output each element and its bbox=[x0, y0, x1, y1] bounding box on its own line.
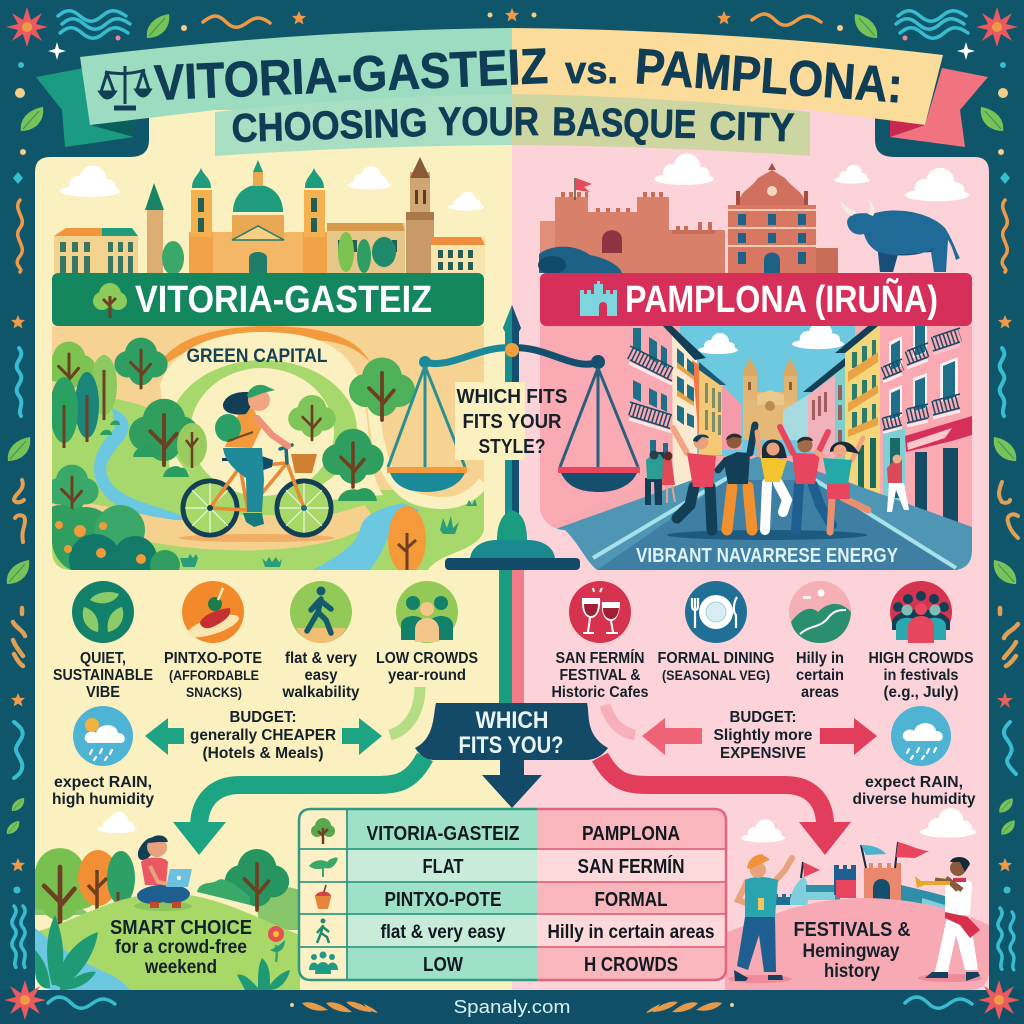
title line 2: CHOOSING bbox=[231, 101, 428, 151]
icon: rain and sun bbox=[73, 706, 133, 766]
centre strip bbox=[499, 570, 524, 705]
background people bbox=[645, 450, 909, 512]
title line 2: CITY bbox=[709, 104, 795, 150]
ribbon tails bbox=[36, 68, 988, 147]
river right bbox=[313, 503, 420, 570]
title line 1: PAMPLONA: bbox=[633, 38, 905, 114]
centre balance scale bbox=[387, 305, 640, 570]
weather label bbox=[852, 774, 976, 808]
flow arrow: to Pamplona bbox=[600, 757, 851, 855]
label: QUIET, bbox=[80, 650, 126, 667]
icon: walking person bbox=[290, 581, 352, 643]
ribbon band bbox=[80, 28, 943, 125]
title line 2: YOUR bbox=[438, 100, 539, 144]
arrow: left bbox=[145, 718, 184, 755]
column: Pamplona: FORMAL bbox=[594, 889, 668, 911]
shrub bbox=[237, 958, 290, 990]
label: certain bbox=[796, 667, 844, 684]
budget text: Slightly more bbox=[714, 727, 813, 744]
bush mounds bbox=[100, 420, 377, 501]
trees bbox=[42, 338, 426, 574]
icon: hills bbox=[789, 581, 851, 643]
buildings right bbox=[783, 326, 972, 530]
icon: big crowd bbox=[890, 581, 952, 643]
table cells bbox=[299, 809, 726, 980]
label: LOW CROWDS bbox=[376, 650, 478, 667]
label: VIBE bbox=[86, 684, 120, 701]
label: SUSTAINABLE bbox=[53, 667, 153, 684]
column: Vitoria-Gasteiz: LOW bbox=[423, 954, 463, 976]
hill bbox=[725, 898, 989, 990]
column: Pamplona: H CROWDS bbox=[584, 954, 678, 976]
flower bbox=[268, 926, 285, 962]
icon: balance scale bbox=[100, 66, 150, 108]
dancers bbox=[673, 425, 868, 532]
title line 1: vs. bbox=[565, 50, 618, 92]
icon: rain cloud bbox=[891, 706, 951, 766]
column: Vitoria-Gasteiz: VITORIA-GASTEIZ bbox=[366, 823, 520, 845]
skyline: Vitoria-Gasteiz bbox=[54, 157, 485, 275]
bushes and berries bbox=[52, 499, 477, 570]
man with hat bbox=[728, 854, 792, 983]
text: smart choice: SMART CHOICE bbox=[110, 917, 252, 939]
label: SNACKS) bbox=[186, 684, 242, 700]
budget text: generally CHEAPER bbox=[190, 727, 336, 744]
budget text bbox=[714, 709, 813, 762]
title line 2: BASQUE bbox=[552, 100, 697, 147]
weather label: expect RAIN, bbox=[54, 774, 152, 791]
title line 1: VITORIA-GASTEIZ bbox=[153, 38, 549, 111]
illustration: Pamplona street bbox=[540, 322, 972, 570]
label bbox=[53, 650, 153, 701]
label bbox=[658, 650, 774, 683]
castle skyline bbox=[776, 842, 945, 909]
text: festivals: history bbox=[824, 961, 880, 982]
budget text: EXPENSIVE bbox=[720, 745, 806, 762]
title line 1 bbox=[153, 38, 905, 114]
column: Vitoria-Gasteiz: PINTXO-POTE bbox=[384, 889, 502, 911]
flourish: left bbox=[290, 1002, 378, 1013]
weather label: high humidity bbox=[52, 791, 154, 808]
label bbox=[552, 648, 649, 701]
feature row: Vitoria-Gasteiz bbox=[53, 581, 478, 701]
river bbox=[35, 928, 130, 990]
header: Vitoria-Gasteiz bbox=[52, 273, 484, 326]
label: easy bbox=[304, 667, 338, 684]
title line 2 bbox=[231, 100, 795, 151]
column: Pamplona: Hilly in certain areas bbox=[548, 922, 714, 943]
arrow: right bbox=[342, 718, 382, 755]
subtitle band bbox=[215, 94, 810, 156]
city name: VITORIA-GASTEIZ bbox=[135, 279, 432, 321]
which fits you banner: WHICH bbox=[476, 707, 548, 734]
icon: wine glasses bbox=[569, 581, 631, 643]
question text: FITS YOUR bbox=[462, 411, 562, 433]
connector: low crowds bbox=[390, 687, 420, 735]
column: Vitoria-Gasteiz bbox=[366, 823, 520, 976]
icon: pintxo bbox=[182, 581, 244, 643]
weather label: expect RAIN, bbox=[865, 774, 963, 791]
footer band bbox=[0, 980, 1024, 1024]
church bbox=[742, 357, 798, 440]
trumpeter bbox=[915, 857, 982, 982]
icon: small group bbox=[396, 581, 458, 643]
header: Pamplona bbox=[540, 273, 972, 326]
question backing bbox=[455, 382, 525, 460]
label: Historic Cafes bbox=[552, 684, 649, 701]
scene: smart choice bbox=[19, 812, 300, 990]
label bbox=[868, 650, 974, 701]
text: smart choice: for a crowd-free bbox=[115, 937, 247, 958]
label: (SEASONAL VEG) bbox=[662, 667, 770, 683]
column: Pamplona bbox=[548, 823, 714, 976]
title ribbon bbox=[36, 28, 988, 156]
left pan bbox=[387, 366, 467, 492]
label: SAN FERMÍN bbox=[556, 648, 644, 667]
label: in festivals bbox=[884, 667, 959, 684]
leafy plant bbox=[35, 915, 98, 990]
label: PINTXO-POTE bbox=[164, 650, 262, 667]
column: Vitoria-Gasteiz: FLAT bbox=[422, 856, 464, 878]
cyclist bbox=[179, 385, 335, 542]
icon: bull bbox=[840, 199, 960, 272]
buildings left bbox=[627, 326, 742, 487]
label bbox=[376, 650, 478, 684]
question text: STYLE? bbox=[478, 436, 546, 458]
windows with white frames bbox=[889, 326, 958, 421]
right pan bbox=[558, 368, 640, 492]
label: green capital: GREEN CAPITAL bbox=[186, 346, 328, 367]
label: FESTIVAL & bbox=[560, 667, 641, 684]
label: Hilly in bbox=[796, 650, 844, 667]
budget row: Pamplona bbox=[605, 705, 976, 808]
caption: vibrant navarrese energy: VIBRANT NAVARRESE ENERGY bbox=[636, 545, 899, 567]
shop awning bbox=[905, 416, 972, 452]
label: HIGH CROWDS bbox=[868, 650, 974, 667]
scene: festivals bbox=[725, 808, 989, 990]
illustration: green capital cyclist bbox=[40, 326, 484, 586]
icon: sustainable leaves bbox=[72, 581, 134, 643]
website: Spanaly.com bbox=[454, 997, 570, 1017]
pale halo around centre scale bbox=[525, 326, 597, 570]
icon: castle bbox=[580, 281, 617, 316]
text: smart choice: weekend bbox=[144, 957, 217, 978]
road bbox=[52, 502, 372, 550]
column: Pamplona: PAMPLONA bbox=[582, 823, 680, 845]
text: festivals: FESTIVALS & bbox=[794, 919, 910, 941]
base bbox=[445, 510, 580, 570]
icon: tree bbox=[93, 283, 127, 318]
budget text: (Hotels & Meals) bbox=[202, 745, 324, 762]
arm bbox=[419, 343, 605, 369]
city name: PAMPLONA (IRUÑA) bbox=[625, 277, 938, 321]
label: flat & very bbox=[285, 650, 357, 667]
budget text bbox=[190, 709, 336, 762]
budget row: Vitoria-Gasteiz bbox=[52, 687, 420, 808]
label: walkability bbox=[282, 684, 360, 701]
label bbox=[282, 650, 360, 701]
icon: plate and cutlery bbox=[685, 581, 747, 643]
connector: festivals bbox=[605, 705, 635, 735]
weather label: diverse humidity bbox=[852, 791, 976, 808]
budget text: BUDGET: bbox=[730, 709, 796, 726]
post bbox=[503, 305, 521, 570]
hill bbox=[35, 893, 300, 990]
column: Vitoria-Gasteiz: flat & very easy bbox=[380, 922, 506, 943]
label: (e.g., July) bbox=[884, 684, 958, 701]
question text bbox=[456, 386, 568, 458]
budget text: BUDGET: bbox=[230, 709, 296, 726]
label: year-round bbox=[388, 667, 466, 684]
text: smart choice bbox=[110, 920, 252, 973]
weather label bbox=[52, 774, 154, 808]
sky bbox=[680, 322, 855, 456]
text: festivals bbox=[794, 919, 910, 982]
street bbox=[553, 453, 972, 570]
question text: WHICH FITS bbox=[456, 386, 568, 408]
comparison table bbox=[299, 809, 726, 980]
which fits you banner bbox=[415, 703, 608, 808]
label: areas bbox=[801, 684, 839, 701]
feature row: Pamplona bbox=[552, 581, 974, 701]
column: Pamplona: SAN FERMÍN bbox=[578, 855, 684, 878]
flow arrow: to Vitoria-Gasteiz bbox=[173, 757, 425, 855]
label bbox=[796, 650, 844, 701]
arrow: left bbox=[642, 718, 702, 755]
river left bbox=[94, 408, 183, 520]
girl with laptop bbox=[134, 835, 192, 911]
arrow: right bbox=[820, 718, 877, 755]
label bbox=[164, 650, 262, 700]
label: (AFFORDABLE bbox=[169, 667, 259, 683]
label: FORMAL DINING bbox=[658, 650, 774, 667]
text: festivals: Hemingway bbox=[802, 941, 900, 962]
skyline: Pamplona bbox=[538, 154, 969, 274]
which fits you banner: FITS YOU? bbox=[458, 732, 564, 759]
flourish: right bbox=[646, 1002, 734, 1013]
table icons bbox=[309, 818, 338, 974]
